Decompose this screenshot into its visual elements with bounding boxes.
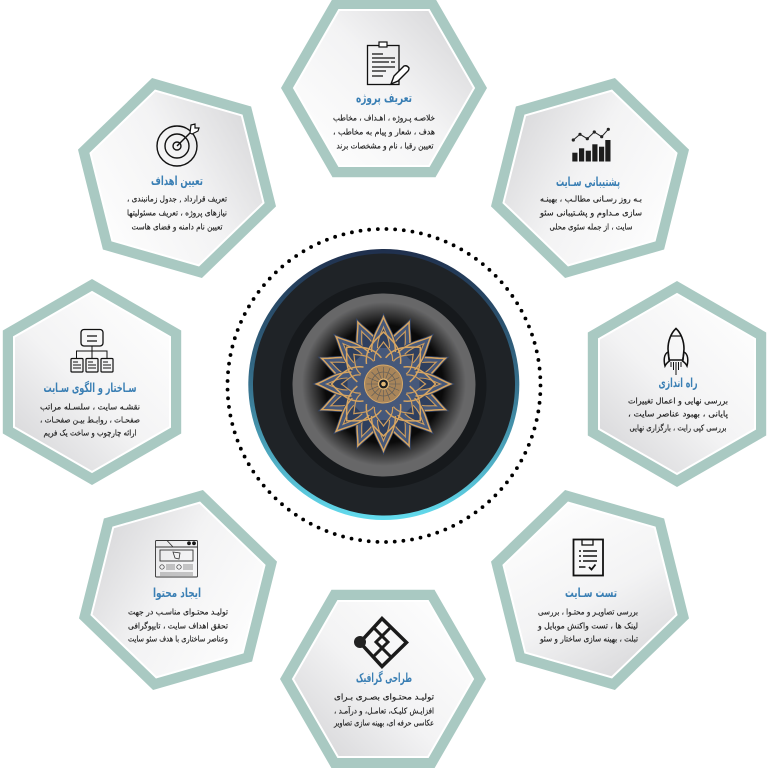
text: goal setting [127, 194, 227, 232]
text: content creation [128, 608, 228, 644]
text: goal setting: نیازهای پروژه ، تعریف مسئولیتها [127, 208, 227, 218]
panel: graphic design [280, 590, 486, 768]
text: graphic design: عکاسی حرفه ای، بهینه سازی تصاویر [333, 718, 434, 728]
text: content creation: تحقق اهداف سایت ، تایپوگرافی [128, 620, 228, 630]
panel: content creation [54, 476, 302, 704]
panel: launch [588, 281, 766, 487]
text: site support: سازی مـداوم و پشـتیبانی سئو [539, 208, 642, 218]
panel: site support [466, 64, 714, 292]
text: project definition [333, 114, 435, 150]
text: project definition: خلاصـه پـروژه ، اهـداف ، مخاطب [333, 114, 435, 122]
text: graphic design: تولیـد محتـوای بصـری بـرای [334, 692, 434, 702]
icon: browser window [156, 540, 198, 577]
text: graphic design: افزایـش کلیـک، تعامـل، و درآمـد ، [334, 706, 434, 716]
text: launch: پایانی ، بهبود عناصر سایت ، [628, 410, 728, 418]
heading: content creation: ایجاد محتوا [153, 585, 201, 600]
panel: site testing [466, 476, 714, 704]
central emblem [248, 249, 519, 520]
gradient ring [248, 249, 519, 520]
text: launch: بررسی نهایی و اعمال تغییرات [628, 396, 728, 406]
text: site structure: ارائه چارچوب و ساخت یک فریم [44, 428, 136, 438]
text: site testing: بررسی تصاویـر و محتـوا ، بررسی [538, 608, 638, 616]
heading: goal setting: تعیین اهداف [151, 173, 203, 188]
text: site structure: صفحـات ، روابـط بیـن صفحـات ، [40, 416, 140, 424]
panel: site structure [3, 279, 181, 485]
text: site testing: تبلت ، بهینه سازی ساختار و سئو [539, 634, 638, 644]
text: content creation: وعناصر ساختاری با هدف سئو سایت [128, 634, 228, 644]
text: launch: بررسی کپی رایت ، بارگزاری نهایی [630, 422, 726, 432]
text: site support [539, 194, 642, 232]
heading: site testing: تست سـایت [565, 585, 617, 600]
text: site structure: نقشـه سایت ، سلسـله مراتب [40, 402, 140, 412]
heading: launch: راه اندازی [658, 375, 698, 390]
text: content creation: تولیـد محتـوای مناسـب در جهت [128, 608, 228, 616]
icon: rocket [664, 328, 688, 375]
text: graphic design [333, 692, 434, 728]
text: project definition: تعیین رقبا ، نام و مشخصات برند [336, 142, 434, 150]
icon: clipboard and pencil [368, 42, 409, 84]
icon: target and arrow [157, 124, 199, 166]
heading: site support: پشتیبانی سـایت [556, 174, 620, 189]
dotted ring [228, 229, 540, 542]
text: site testing: لینک ها ، تست واکنش موبایل و [537, 622, 638, 630]
panel: project definition [281, 0, 487, 177]
text: site support: بـه روز رسـانی مطالـب ، بهینـه [540, 194, 642, 204]
text: goal setting: تعریف قرارداد , جدول زمانبندی ، [127, 194, 227, 204]
text: site testing [537, 608, 638, 644]
text: launch [628, 396, 728, 432]
text: site support: سایت ، از جمله سئوی محلی [550, 222, 633, 232]
heading: project definition: تعریف پروژه [356, 90, 412, 105]
heading: graphic design: طراحی گرافیک [356, 670, 412, 685]
text: site structure [40, 402, 140, 438]
mandala [316, 317, 450, 451]
icon: checklist [574, 540, 603, 576]
text: project definition: هدف ، شعار و پیام به مخاطب ، [333, 128, 435, 136]
panel: goal setting [53, 64, 301, 292]
icon: sitemap [71, 330, 113, 372]
icon: diamond logo [354, 618, 406, 666]
icon: bar and line chart [572, 128, 610, 162]
text: goal setting: تعیین نام دامنه و فضای هاست [132, 222, 222, 232]
heading: site structure: سـاختار و الگوی سـایت [44, 380, 136, 395]
